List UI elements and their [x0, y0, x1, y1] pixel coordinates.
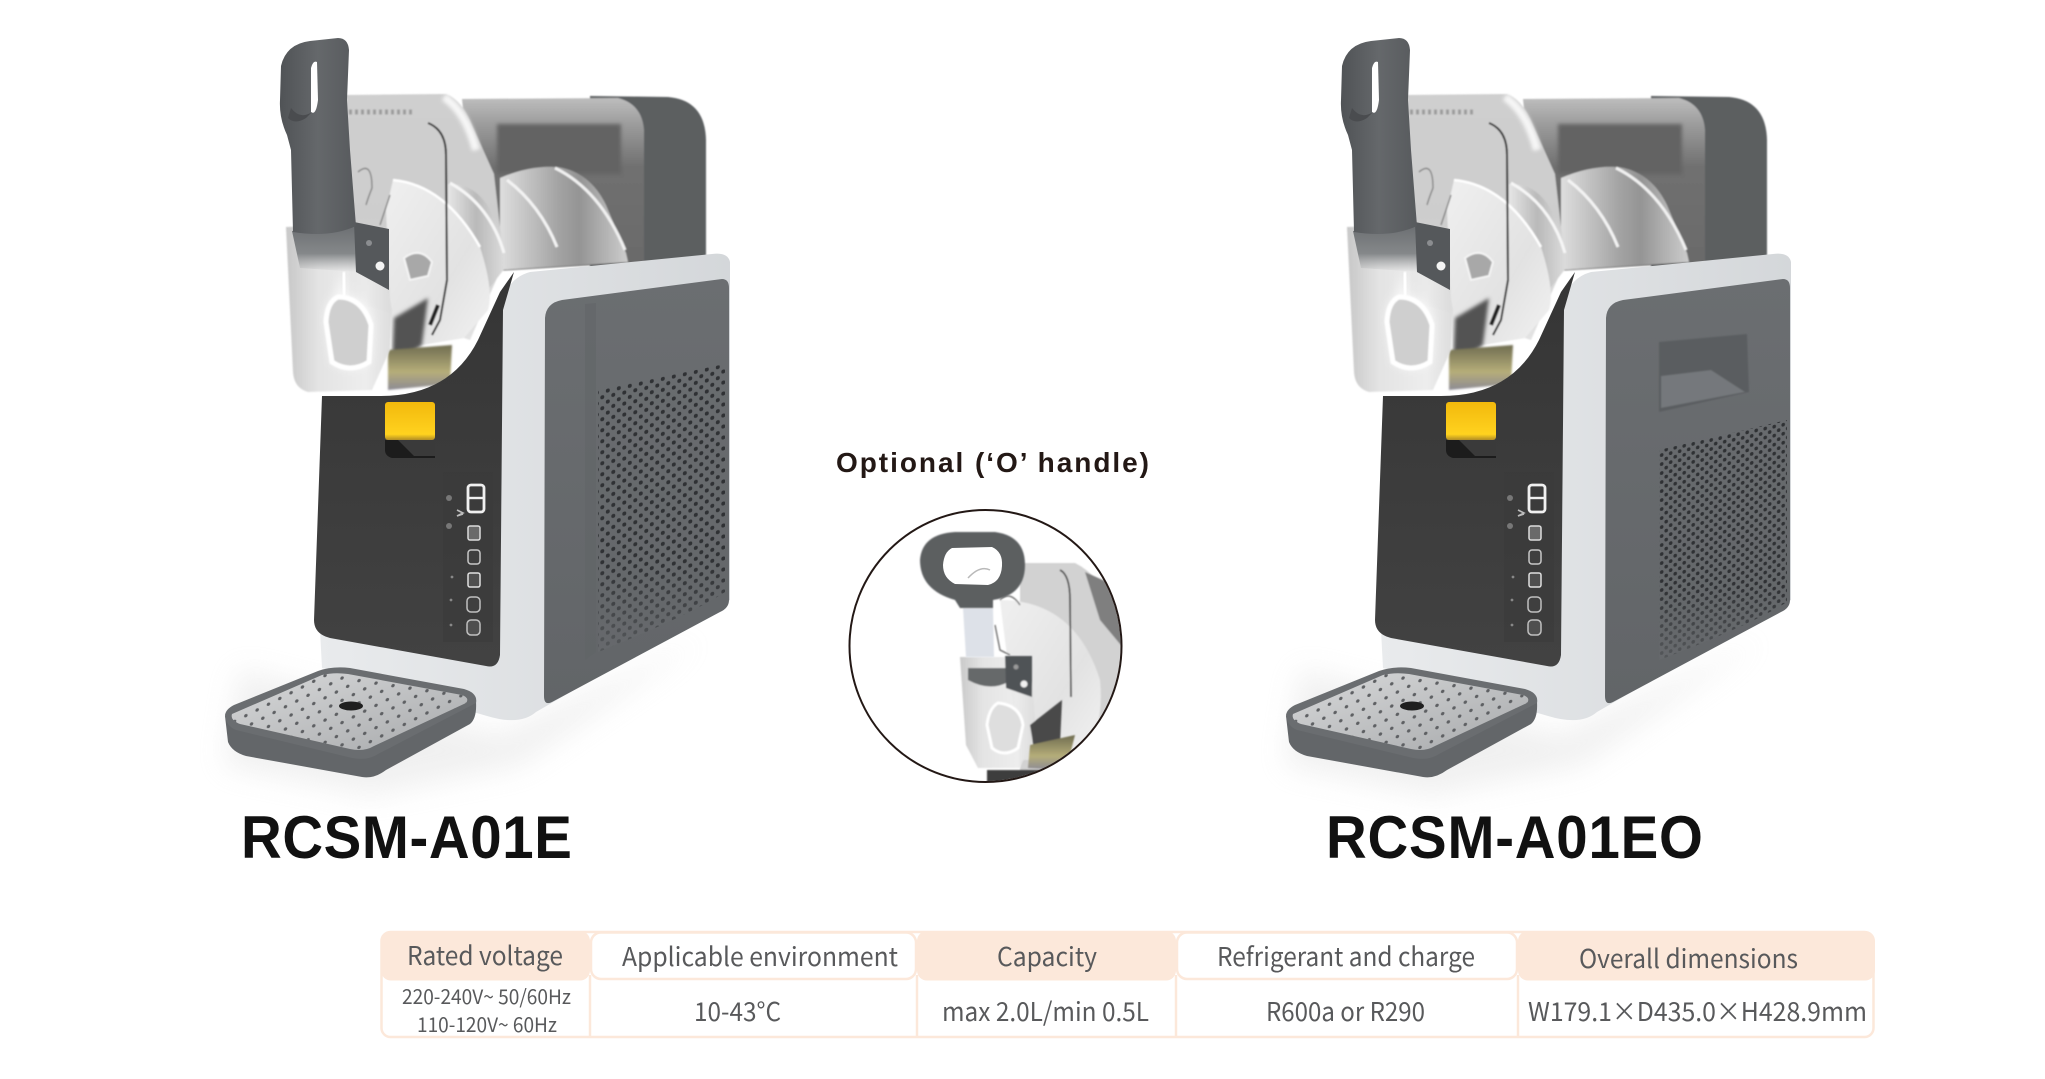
header: rated voltage: Rated voltage — [407, 936, 563, 973]
header: applicable environment: Applicable environment — [622, 937, 898, 974]
white frame — [320, 254, 730, 720]
value: capacity: max 2.0L/min 0.5L — [942, 992, 1149, 1029]
table outline and column rules — [382, 932, 1874, 1037]
header: refrigerant and charge — [1177, 932, 1517, 979]
soft floor shadow — [225, 640, 700, 795]
clear dispensing bowl and paddle — [286, 222, 392, 392]
value: dimensions: W179.1×D435.0×H428.9mm — [1528, 992, 1867, 1029]
clear bowl — [960, 656, 1075, 785]
product: RCSM-A01E machine — [225, 38, 730, 795]
value: refrigerant: R600a or R290 — [1266, 992, 1425, 1029]
soft floor shadow — [1286, 640, 1761, 795]
side panel with carry recess and grille — [1605, 279, 1790, 703]
model name left: RCSM-A01E — [241, 804, 572, 871]
drip tray — [1286, 667, 1537, 777]
value: rated voltage: 110-120V~ 60Hz — [417, 1009, 557, 1038]
dark control panel, yellow lever and display — [314, 272, 514, 667]
O handle ring — [920, 532, 1025, 608]
value: rated voltage — [402, 981, 571, 1038]
hopper and back body — [346, 94, 706, 390]
product: RCSM-A01EO machine — [1286, 38, 1791, 795]
white frame — [1381, 254, 1791, 720]
header: overall dimensions — [1518, 931, 1875, 980]
flat pull handle — [1341, 38, 1417, 234]
hopper and back body — [1407, 94, 1767, 390]
header: capacity: Capacity — [997, 937, 1097, 974]
hopper in inset — [995, 563, 1125, 782]
flat pull handle — [280, 38, 356, 234]
header: overall dimensions: Overall dimensions — [1579, 939, 1798, 976]
header: capacity — [917, 931, 1176, 980]
header: refrigerant and charge: Refrigerant and charge — [1217, 937, 1475, 974]
model name right: RCSM-A01EO — [1326, 804, 1703, 871]
specification table — [381, 931, 1875, 1038]
clear dispensing bowl and paddle — [1347, 222, 1453, 392]
stem — [963, 608, 994, 657]
value: environment: 10-43°C — [694, 992, 781, 1029]
inset: O handle circle — [850, 510, 1125, 785]
dark control panel, yellow lever and display — [1375, 272, 1575, 667]
header: rated voltage — [381, 931, 590, 980]
side panel with grille — [544, 279, 729, 703]
drip tray — [225, 667, 476, 777]
value: rated voltage: 220-240V~ 50/60Hz — [402, 981, 571, 1010]
optional handle heading: Optional (‘O’ handle) — [836, 447, 1149, 478]
